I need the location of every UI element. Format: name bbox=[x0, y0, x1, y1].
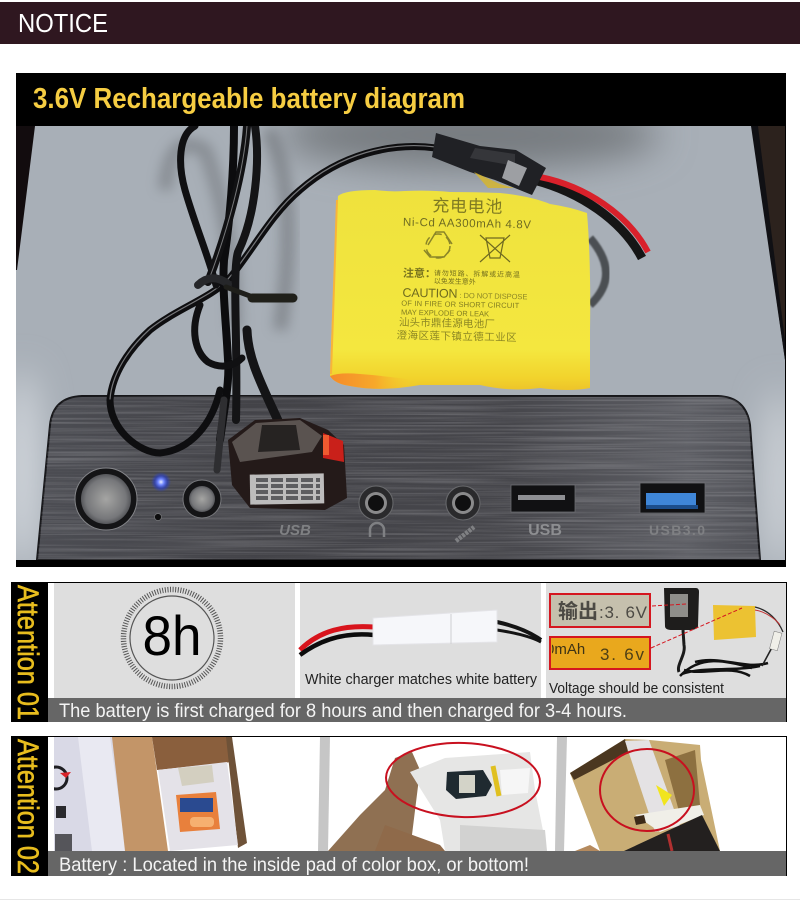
callout: charger output voltage: 输出 bbox=[558, 600, 598, 623]
inner white box bbox=[158, 762, 238, 851]
USB port bbox=[511, 485, 575, 512]
battery label text: 以免发生意外 bbox=[434, 276, 476, 286]
battery label text bbox=[396, 196, 532, 344]
port label: USB2: USB bbox=[528, 522, 562, 539]
blue power LED bbox=[151, 472, 171, 492]
battery pack bbox=[330, 190, 590, 390]
battery label text: MAY EXPLODE OR LEAK bbox=[401, 308, 489, 319]
tab: Attention 02: Attention 02 bbox=[11, 739, 44, 874]
caption bar: battery location bbox=[48, 851, 786, 876]
battery label text: 澄海区莲下镇立德工业区 bbox=[396, 329, 517, 344]
headphone icon bbox=[370, 523, 384, 537]
computer front panel bbox=[30, 396, 770, 560]
callout: charger output voltage bbox=[550, 594, 650, 627]
mic jack bbox=[446, 486, 480, 520]
battery label text: 汕头市鼎佳源电池厂 bbox=[399, 316, 495, 331]
callout: battery voltage: 0mAh bbox=[546, 641, 585, 658]
dashed link lines bbox=[651, 604, 742, 648]
card: voltage should be consistent bbox=[546, 583, 786, 698]
callout: charger output voltage: :3. 6V bbox=[599, 603, 648, 622]
microphone label icon bbox=[456, 527, 474, 541]
cardboard interior bbox=[152, 737, 232, 770]
battery label text: CAUTION bbox=[402, 286, 458, 301]
cardboard flap bbox=[112, 737, 168, 851]
red circle highlight 1 bbox=[385, 740, 541, 820]
battery label text: 注意： bbox=[403, 266, 436, 280]
callout: battery voltage bbox=[546, 637, 650, 669]
panel: Attention 02 bbox=[11, 736, 786, 876]
cable bundle bbox=[110, 126, 436, 470]
battery label text: Ni-Cd AA300mAh 4.8V bbox=[403, 217, 531, 231]
crossed-out bin symbol bbox=[480, 235, 510, 262]
title: 3.6V Rechargeable battery diagram: 3.6V Rechargeable battery diagram bbox=[33, 83, 465, 115]
USB 3.0 port bbox=[640, 483, 705, 513]
small button bbox=[183, 480, 221, 518]
icon: wall charger bbox=[664, 588, 776, 676]
icon: yellow battery bbox=[713, 605, 783, 651]
hand holding foam bbox=[328, 752, 445, 851]
photo: battery inside colour box bbox=[45, 737, 720, 851]
colour box side bbox=[54, 737, 125, 851]
connector and red and black wires bbox=[432, 133, 648, 258]
caption bar: charging instruction: The battery is first charged for 8 hours and then charged for 3-4 hours. bbox=[59, 700, 627, 722]
audio jack bbox=[359, 486, 393, 520]
icon: 8h dial bbox=[124, 590, 220, 686]
recycling symbol bbox=[424, 232, 452, 258]
header bar: NOTICE bbox=[0, 2, 800, 44]
USB charger adapter bbox=[228, 418, 347, 510]
battery label text: : DO NOT DISPOSE bbox=[459, 291, 528, 301]
icon: 8h dial: 8h bbox=[142, 604, 202, 667]
card: 8h charge time bbox=[54, 583, 295, 698]
caption: white charger: White charger matches white battery bbox=[305, 672, 538, 688]
battery label text: OF IN FIRE OR SHORT CIRCUIT bbox=[401, 299, 520, 310]
port label: USB3.0: USB3.0 bbox=[649, 522, 705, 538]
battery label text: 充电电池 bbox=[432, 196, 503, 217]
callout: battery voltage: 3. 6v bbox=[600, 645, 644, 664]
opened cardboard box bbox=[570, 739, 720, 851]
port label: USB: USB bbox=[279, 522, 311, 539]
reset hole bbox=[154, 514, 162, 520]
foam insert bbox=[410, 752, 547, 851]
photo: battery on computer case bbox=[8, 100, 794, 570]
white connector block bbox=[373, 610, 497, 645]
panel: Attention 01 bbox=[11, 582, 786, 722]
tab: Attention 01: Attention 01 bbox=[11, 585, 44, 720]
power button bbox=[75, 468, 137, 530]
battery label text: 请勿短路、拆解或近高温 bbox=[434, 268, 520, 279]
caption bar: battery location: Battery : Located in the inside pad of color box, or bottom! bbox=[59, 854, 529, 876]
card: white charger matches white battery bbox=[300, 583, 541, 698]
red circle highlight 2 bbox=[600, 749, 694, 831]
grey divider post 2 bbox=[555, 737, 567, 851]
black charger in foam bbox=[446, 770, 492, 799]
orange battery label bbox=[176, 792, 220, 832]
grey divider post 1 bbox=[318, 737, 330, 851]
caption: voltage: Voltage should be consistent bbox=[549, 681, 724, 697]
heading: NOTICE: NOTICE bbox=[18, 8, 108, 38]
yellow wire bbox=[493, 766, 499, 796]
panel: 3.6V rechargeable battery diagram bbox=[8, 73, 794, 570]
